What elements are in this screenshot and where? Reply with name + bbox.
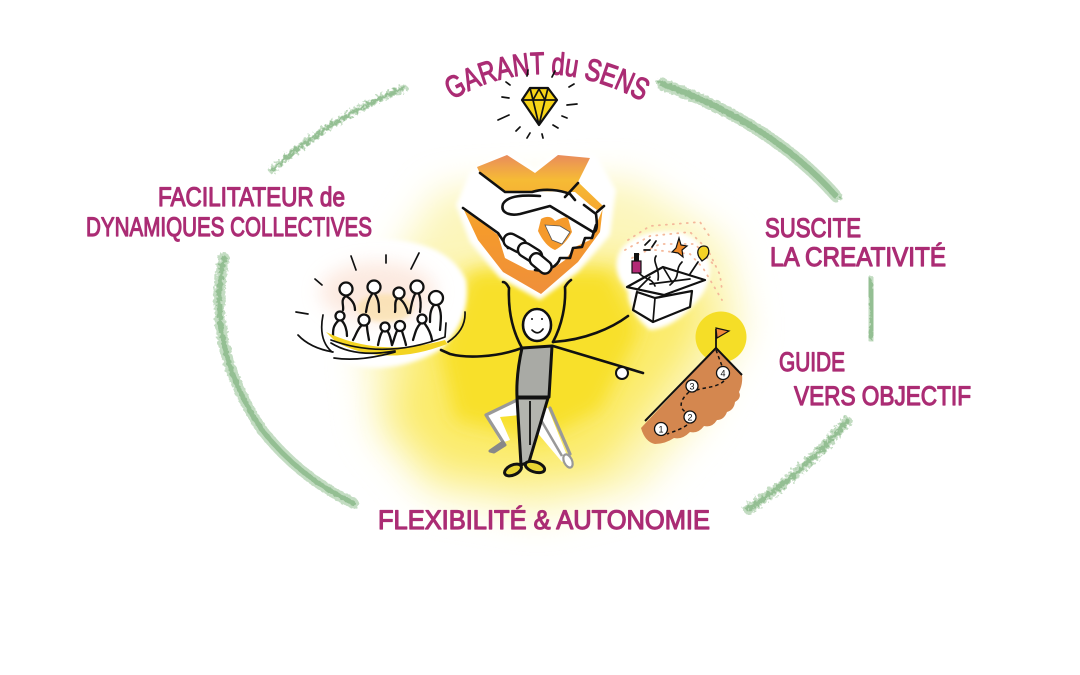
flag	[715, 329, 717, 348]
handshake hands	[463, 173, 604, 272]
steps 1 to 4: 3	[689, 382, 695, 392]
heading: facilitateur de dynamiques collectives: DYNAMIQUES COLLECTIVES	[86, 212, 372, 242]
ring: right short green arc	[869, 281, 873, 336]
ring: top-right green arc	[662, 84, 836, 196]
box	[633, 291, 692, 322]
white cloud with orange speckle	[616, 231, 710, 330]
brown mountain	[641, 348, 742, 444]
small heart inside	[538, 217, 572, 250]
white and pink cloud	[290, 239, 467, 368]
heading: facilitateur de dynamiques collectives	[86, 182, 372, 242]
heart white halo	[456, 150, 616, 300]
steps 1 to 4: 1	[658, 424, 664, 434]
fingers	[501, 231, 554, 276]
star	[672, 238, 687, 257]
yellow sun	[696, 312, 746, 362]
illustration: mountain path with flag	[641, 312, 746, 444]
background: yellow watercolour wash	[365, 180, 745, 515]
icon: diamond with rays	[498, 70, 577, 138]
orange heart	[463, 155, 603, 294]
heading: guide vers objectif: VERS OBJECTIF	[794, 381, 971, 411]
legs	[517, 398, 548, 465]
illustration: collective group in a boat	[290, 239, 467, 368]
heading: guide vers objectif: GUIDE	[779, 347, 845, 377]
boat and motion lines	[326, 332, 447, 356]
steps 1 to 4: 2	[687, 412, 693, 422]
steps 1 to 4: 4	[720, 368, 726, 378]
illustration: heart with handshake	[456, 150, 616, 300]
bottle	[632, 253, 641, 273]
back legs in grey	[486, 399, 568, 462]
torso	[517, 346, 552, 397]
heading: guide vers objectif	[779, 347, 971, 411]
illustration: open box with ideas	[616, 222, 722, 330]
streamers	[639, 240, 698, 286]
ring: lower-right green arc	[748, 421, 847, 509]
heading: suscite la créativité: SUSCITE	[765, 213, 861, 243]
head	[523, 309, 551, 341]
heading: facilitateur de dynamiques collectives: FACILITATEUR de	[158, 182, 345, 212]
heading: flexibilité et autonomie: FLEXIBILITÉ & AUTONOMIE	[378, 505, 710, 535]
ring: left green arc	[219, 258, 353, 503]
ring: top-left green arc	[272, 88, 404, 170]
heading: suscite la créativité: LA CREATIVITÉ	[770, 242, 946, 272]
arms	[503, 280, 571, 348]
feet	[503, 462, 523, 478]
title: garant du sens: GARANT du SENS	[445, 52, 650, 100]
heading: suscite la créativité	[765, 213, 946, 272]
front row people	[333, 312, 432, 345]
dashed path	[667, 350, 724, 434]
bulb	[698, 246, 709, 261]
steps 1 to 4	[654, 366, 730, 436]
character: central person with many arms	[441, 280, 643, 478]
back row people	[340, 280, 443, 330]
